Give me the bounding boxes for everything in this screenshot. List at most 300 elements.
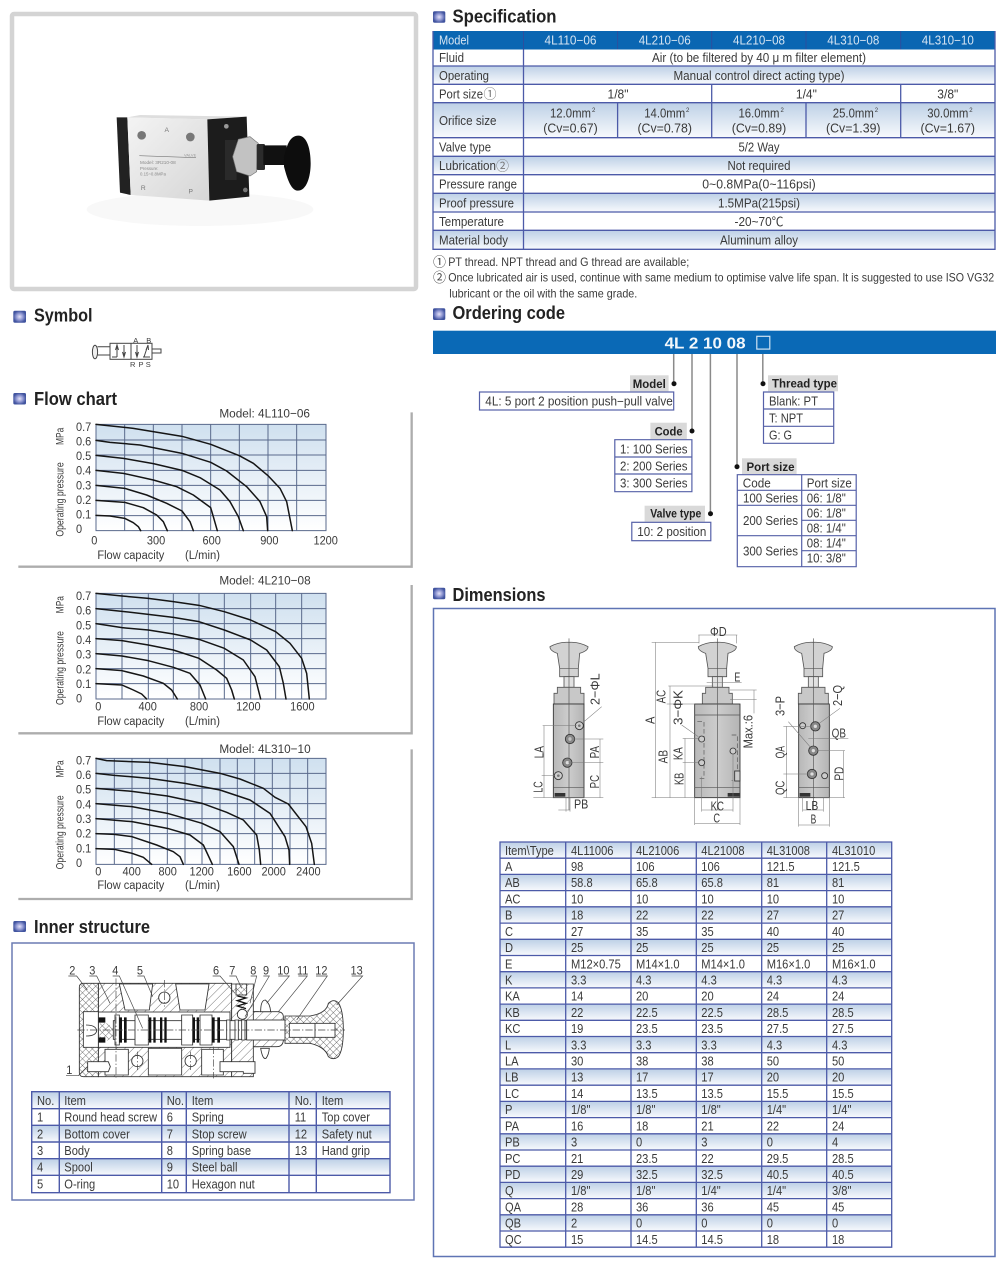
row labels: Port size <box>439 87 483 101</box>
table values: 16 <box>571 1119 584 1134</box>
table values: 45 <box>832 1200 845 1215</box>
table values: 25 <box>832 940 845 955</box>
view: front: A <box>642 717 657 724</box>
parts list table: Stop screw <box>192 1127 247 1142</box>
row values <box>543 51 975 247</box>
parts list table: Item <box>64 1093 86 1108</box>
table values: 19 <box>571 1021 584 1036</box>
axis labels: MPa <box>54 595 66 613</box>
axis labels: 0.1 <box>76 677 91 691</box>
table values: 20 <box>701 989 714 1004</box>
axis labels: 2400 <box>296 865 321 878</box>
axis labels: 0 <box>95 865 102 878</box>
table values: 3.3 <box>571 1038 587 1052</box>
table values: 1/4" <box>767 1184 786 1198</box>
table values: P <box>505 1103 513 1117</box>
curves: pressure lines <box>96 758 314 864</box>
part number callouts: 11 <box>297 964 308 978</box>
table values: 27.5 <box>767 1021 789 1036</box>
part number callouts: 6 <box>213 964 219 978</box>
table values: 0 <box>636 1216 643 1231</box>
row values: 2 <box>592 108 596 114</box>
icon: valve circuit symbol: A <box>133 336 138 345</box>
view: side left: LC <box>531 781 546 793</box>
footnotes: lubricant or the oil with the same grade. <box>449 286 637 300</box>
label: Code: Code <box>655 424 683 438</box>
heading: Specification: Specification <box>452 6 556 26</box>
table values: 14 <box>571 989 584 1004</box>
icon: ordering code heading marker <box>433 308 445 320</box>
table values: AC <box>505 892 521 907</box>
axis labels: 0.1 <box>76 842 91 855</box>
table header row: 4L310−08 <box>827 34 879 48</box>
table values: 13.5 <box>636 1086 658 1101</box>
row labels: Orifice size <box>439 114 497 128</box>
parts list table: Top cover <box>322 1110 370 1125</box>
axis labels: (L/min) <box>185 714 220 728</box>
row values: 3/8" <box>937 87 958 101</box>
row values: 14.0mm <box>644 107 685 121</box>
row values: 2 <box>875 108 879 114</box>
table values: PA <box>505 1119 519 1134</box>
axis labels <box>54 742 321 892</box>
axis labels: 0.7 <box>76 589 91 603</box>
icon: dimensions heading marker <box>433 588 445 599</box>
icon: valve circuit symbol: S <box>146 360 151 369</box>
row labels: Pressure range <box>439 178 517 192</box>
axis labels: 0.2 <box>76 663 91 677</box>
table values: 65.8 <box>636 876 658 890</box>
part number callouts: 9 <box>263 964 269 978</box>
table header row: 4L110−06 <box>544 34 597 48</box>
table values: 3/8" <box>832 1184 851 1198</box>
panel: inner structure <box>12 943 414 1200</box>
row values: 2 <box>969 108 973 114</box>
view: front: C <box>713 810 720 825</box>
axis labels: MPa <box>54 427 66 445</box>
row labels: Proof pressure <box>439 196 514 210</box>
label: Port size: 06: 1/8" <box>807 506 846 520</box>
parts list table: Item <box>192 1093 213 1108</box>
axis labels: 600 <box>203 534 221 548</box>
parts list table: 1 <box>37 1110 43 1125</box>
axis labels: 0.2 <box>76 827 91 841</box>
row labels: Valve type <box>439 141 491 155</box>
parts list table: Spool <box>64 1160 93 1175</box>
axis labels <box>54 574 315 728</box>
view: front: 3−ΦK <box>671 690 686 725</box>
heading: Dimensions: Dimensions <box>452 585 546 605</box>
table values: 23.5 <box>636 1021 658 1036</box>
table values: 81 <box>832 876 844 890</box>
axis labels: 0.7 <box>76 420 91 434</box>
parts list table: 10 <box>167 1177 179 1192</box>
table values: 3.3 <box>701 1038 717 1052</box>
table values: 121.5 <box>767 859 795 874</box>
table values: 58.8 <box>571 876 593 890</box>
table values: KC <box>505 1021 521 1036</box>
table values: 40.5 <box>832 1167 854 1182</box>
parts list table: 8 <box>167 1143 173 1158</box>
table values: 20 <box>636 989 649 1004</box>
table values: 10 <box>767 892 779 907</box>
view: side left: 2−ΦL <box>587 673 602 705</box>
parts list table: No. <box>167 1093 184 1108</box>
view: side right <box>772 638 848 827</box>
panel: specification table <box>433 31 995 249</box>
table values: PC <box>505 1151 521 1166</box>
view: side right: QB <box>832 725 846 740</box>
leader lines <box>672 354 766 516</box>
axis labels: 800 <box>159 865 177 878</box>
parts list table: Steel ball <box>192 1160 237 1175</box>
table values: 4L11006 <box>571 843 614 858</box>
table values: 22 <box>767 1119 779 1134</box>
view: front: E <box>734 670 740 685</box>
table values: 40 <box>767 924 779 939</box>
row values: (Cv=1.67) <box>921 122 975 136</box>
axis labels: 1200 <box>236 700 261 714</box>
label: Port size: 200 Series <box>743 514 798 528</box>
parts list table: 2 <box>37 1127 43 1142</box>
axis labels: 0.5 <box>76 783 91 797</box>
row values: 12.0mm <box>550 107 591 121</box>
table values: 22.5 <box>701 1005 723 1020</box>
table values: 27 <box>571 924 583 939</box>
parts list table: 9 <box>167 1160 173 1175</box>
table values: 0 <box>767 1216 773 1231</box>
table values: 22 <box>636 908 648 923</box>
label: Model: Model <box>633 377 666 391</box>
axis labels: 400 <box>139 700 157 714</box>
row values: 1/4" <box>796 87 817 101</box>
table header row: 4L310−10 <box>922 34 974 48</box>
table values: 28 <box>571 1200 584 1215</box>
table header row: 4L210−08 <box>733 34 785 48</box>
axis labels: 0.3 <box>76 479 91 493</box>
parts list table: 6 <box>167 1110 173 1125</box>
row labels: Fluid <box>439 51 464 65</box>
table values: 23.5 <box>701 1021 723 1036</box>
table values: PD <box>505 1167 520 1182</box>
axis labels: Flow capacity <box>97 548 165 562</box>
label: Port size: Code <box>743 476 771 490</box>
table values: 15.5 <box>832 1086 854 1101</box>
axis labels: Operating pressure <box>54 631 66 705</box>
parts list table: 12 <box>295 1127 307 1142</box>
label: Port size: 08: 1/4" <box>807 537 846 551</box>
table values: M16×1.0 <box>767 957 811 971</box>
axis labels: 1600 <box>227 865 252 878</box>
icon: valve circuit symbol <box>92 336 161 369</box>
table values: 25 <box>571 940 584 955</box>
table values: 4.3 <box>636 973 652 988</box>
table values: 14.5 <box>636 1232 658 1247</box>
axis labels: Operating pressure <box>54 795 66 869</box>
label: Valve type: 10: 2 position <box>637 525 706 539</box>
row values: Not required <box>728 159 791 173</box>
view: front: KC <box>711 799 724 814</box>
row values: 2 <box>780 108 784 114</box>
photo: push-pull valve: A <box>164 127 169 134</box>
label: Thread type: T: NPT <box>769 411 803 425</box>
table values: 4L31008 <box>767 843 810 858</box>
table values: 22 <box>571 1005 583 1020</box>
axis labels: 0 <box>91 534 98 548</box>
row values: Manual control direct acting type) <box>674 69 844 83</box>
label: Thread type: Thread type <box>772 376 837 390</box>
table values: 0 <box>636 1135 643 1150</box>
label: Valve type: Valve type <box>650 506 702 520</box>
axis labels: MPa <box>54 760 66 778</box>
axis labels: 0.4 <box>76 798 92 812</box>
axis labels: (L/min) <box>185 548 220 562</box>
axis labels: 0 <box>76 522 83 536</box>
view: front: ΦD <box>710 624 727 639</box>
code bar: 4L 2 10 08 <box>665 335 746 352</box>
table values: Item\Type <box>505 843 554 858</box>
table values: 35 <box>636 924 649 939</box>
panel: dimensions <box>434 608 995 1256</box>
part number callouts: 4 <box>112 964 119 978</box>
axis labels: Model: 4L110−06 <box>219 407 310 421</box>
table values: 14 <box>571 1086 584 1101</box>
table values: 30 <box>571 1054 584 1069</box>
table values: 4L21006 <box>636 843 680 858</box>
axis labels: 300 <box>147 534 166 548</box>
row values: (Cv=1.39) <box>826 122 881 136</box>
row values: (Cv=0.67) <box>543 122 598 136</box>
table values: 20 <box>832 1070 845 1085</box>
axis labels: 0.3 <box>76 812 91 826</box>
code bar <box>433 331 996 354</box>
table values: 2 <box>571 1216 577 1231</box>
label: Code: 1: 100 Series <box>620 442 688 456</box>
table values: 24 <box>832 989 845 1004</box>
footnotes: ① <box>433 254 446 270</box>
table values: 50 <box>767 1054 779 1069</box>
table values: 35 <box>701 924 714 939</box>
view: side right: 3−P <box>772 696 787 716</box>
photo: push-pull valve: Model: 3R210-08 <box>140 160 176 165</box>
parts list table: Round head screw <box>64 1110 157 1125</box>
table values: 15 <box>571 1232 584 1247</box>
row labels: ① <box>484 87 497 102</box>
axis labels <box>54 407 338 562</box>
table values: 36 <box>636 1200 649 1215</box>
row labels <box>439 51 517 247</box>
table values: 10 <box>701 892 714 907</box>
drawing: valve outline views <box>531 624 848 827</box>
table values: 27.5 <box>832 1021 854 1036</box>
table values: E <box>505 957 513 971</box>
view: side right: PD <box>831 767 846 781</box>
table values: 3 <box>701 1135 708 1150</box>
axis labels: 0.6 <box>76 604 91 618</box>
table values: 32.5 <box>636 1167 658 1182</box>
photo: push-pull valve: P <box>188 188 193 195</box>
table values: 28.5 <box>832 1151 854 1166</box>
heading: Flow chart: Flow chart <box>34 389 117 409</box>
axis labels: 2000 <box>262 865 286 878</box>
parts list table: Body <box>64 1143 90 1158</box>
curves: pressure lines <box>96 424 292 531</box>
label: Code: 2: 200 Series <box>620 459 688 473</box>
table values: 1/8" <box>636 1103 655 1117</box>
view: side right: B <box>811 811 816 826</box>
table values: 10 <box>636 892 649 907</box>
table values: 4L31010 <box>832 843 876 858</box>
parts list table: Safety nut <box>322 1127 372 1142</box>
label: Port size: 100 Series <box>743 492 798 506</box>
parts list table <box>32 1092 390 1193</box>
footnotes: PT thread. NPT thread and G thread are available; <box>448 255 689 269</box>
icon: valve circuit symbol: B <box>146 336 151 345</box>
row labels: Lubrication <box>439 159 496 173</box>
row labels: Material body <box>439 233 509 247</box>
parts list table: No. <box>295 1093 312 1108</box>
row values: (Cv=0.78) <box>637 122 692 136</box>
table values: 22 <box>701 1151 714 1166</box>
label: Thread type <box>764 375 838 443</box>
part number callouts: 3 <box>89 964 95 978</box>
parts list table: Hand grip <box>322 1143 370 1158</box>
label: Port size: 06: 1/8" <box>807 492 846 506</box>
table values: 45 <box>767 1200 779 1215</box>
table values: 1/8" <box>701 1103 721 1117</box>
view: side right: QA <box>772 746 787 758</box>
axis labels: 0.1 <box>76 508 91 522</box>
table values: 27 <box>832 908 844 923</box>
table values: 1/8" <box>636 1184 655 1198</box>
table values: 24 <box>767 989 779 1004</box>
axis labels: 900 <box>260 534 279 548</box>
table values: 18 <box>571 908 584 923</box>
photo: push-pull valve: R <box>141 185 146 192</box>
table values: 106 <box>636 859 655 874</box>
icon: valve circuit symbol: P <box>138 360 144 369</box>
view: side left: PC <box>587 775 602 788</box>
table values: 1/8" <box>571 1103 590 1117</box>
view: side right: 2−Q <box>830 685 845 706</box>
table values: 13 <box>571 1070 584 1085</box>
axis labels: 0 <box>76 856 83 870</box>
row values: 2 <box>686 108 690 114</box>
table values: B <box>505 908 513 923</box>
parts list table: Item <box>322 1093 343 1108</box>
table values: 4.3 <box>767 1038 783 1052</box>
parts list table: Spring <box>192 1110 224 1125</box>
label: Code <box>615 423 692 492</box>
axis labels: 1200 <box>313 534 338 548</box>
row values: Aluminum alloy <box>720 233 799 247</box>
row values: 1.5MPa(215psi) <box>718 196 800 210</box>
table values: 40 <box>832 924 845 939</box>
parts list table: 5 <box>37 1177 44 1192</box>
parts list table: 7 <box>167 1127 173 1142</box>
table values: LB <box>505 1070 519 1085</box>
parts list table: No. <box>37 1093 54 1108</box>
table values: 25 <box>636 940 649 955</box>
axis labels: Model: 4L210−08 <box>219 574 311 588</box>
table values: 4.3 <box>767 973 783 988</box>
table values: 0 <box>767 1135 773 1150</box>
table values: 18 <box>767 1232 779 1247</box>
table values: M12×0.75 <box>571 957 621 971</box>
axis labels: Flow capacity <box>97 714 165 728</box>
row values: 30.0mm <box>927 107 968 121</box>
parts list table: 11 <box>295 1110 306 1125</box>
view: front: KA <box>671 747 686 760</box>
table values: QC <box>505 1232 522 1247</box>
axis labels: 1600 <box>290 700 315 714</box>
row labels: Operating <box>439 69 489 83</box>
view: side left <box>531 638 603 812</box>
table values: 106 <box>701 859 720 874</box>
part number callouts: 12 <box>315 964 327 978</box>
table values: K <box>505 973 513 988</box>
table values: 21 <box>701 1119 714 1134</box>
label: Model <box>480 375 674 410</box>
dimensions table <box>500 842 892 1247</box>
row values: 5/2 Way <box>738 141 780 155</box>
table values: M14×1.0 <box>636 957 680 971</box>
row values: Air (to be filtered by 40 μ m filter element) <box>652 51 866 65</box>
heading: Inner structure: Inner structure <box>34 917 150 937</box>
table values: 65.8 <box>701 876 723 890</box>
table values: 121.5 <box>832 859 860 874</box>
part number callouts: 8 <box>250 964 256 978</box>
view: side right: LB <box>806 798 818 813</box>
table values: LA <box>505 1054 519 1069</box>
footnotes <box>433 254 994 300</box>
heading: Symbol: Symbol <box>34 306 92 326</box>
label: Valve type <box>632 506 711 541</box>
label: Port size: 300 Series <box>743 544 798 558</box>
table values: D <box>505 940 513 955</box>
axis labels: 0.5 <box>76 449 91 463</box>
view: side left: PA <box>587 746 602 758</box>
axis labels: 0.4 <box>76 464 92 478</box>
row labels: ② <box>496 158 509 174</box>
photo: push-pull valve: Pressure: <box>140 166 159 171</box>
table values: 23.5 <box>636 1151 658 1166</box>
table values: 38 <box>701 1054 714 1069</box>
footnotes: ② <box>433 270 446 285</box>
table values: LC <box>505 1086 520 1101</box>
row labels: Temperature <box>439 215 504 229</box>
diagram: valve cross section <box>66 964 363 1078</box>
table values: AB <box>505 876 520 890</box>
curves: pressure lines <box>96 593 309 699</box>
photo: push-pull valve <box>87 115 313 226</box>
table header row: 4L210−06 <box>639 34 691 48</box>
panel: ordering code diagram <box>433 331 996 567</box>
icon: valve circuit symbol: R <box>130 360 136 369</box>
parts list table: Hexagon nut <box>192 1177 255 1192</box>
table values: 32.5 <box>701 1167 723 1182</box>
icon: symbol heading marker <box>13 311 26 323</box>
line chart: Model 4L110-06 <box>18 407 412 567</box>
table values: 25 <box>701 940 714 955</box>
view: front <box>642 624 757 825</box>
table values: 17 <box>701 1070 714 1085</box>
table values: 24 <box>832 1119 845 1134</box>
table values: 15.5 <box>767 1086 789 1101</box>
table values: 4.3 <box>701 973 717 988</box>
table values: 4 <box>832 1135 839 1150</box>
table values: 1/8" <box>571 1184 590 1198</box>
